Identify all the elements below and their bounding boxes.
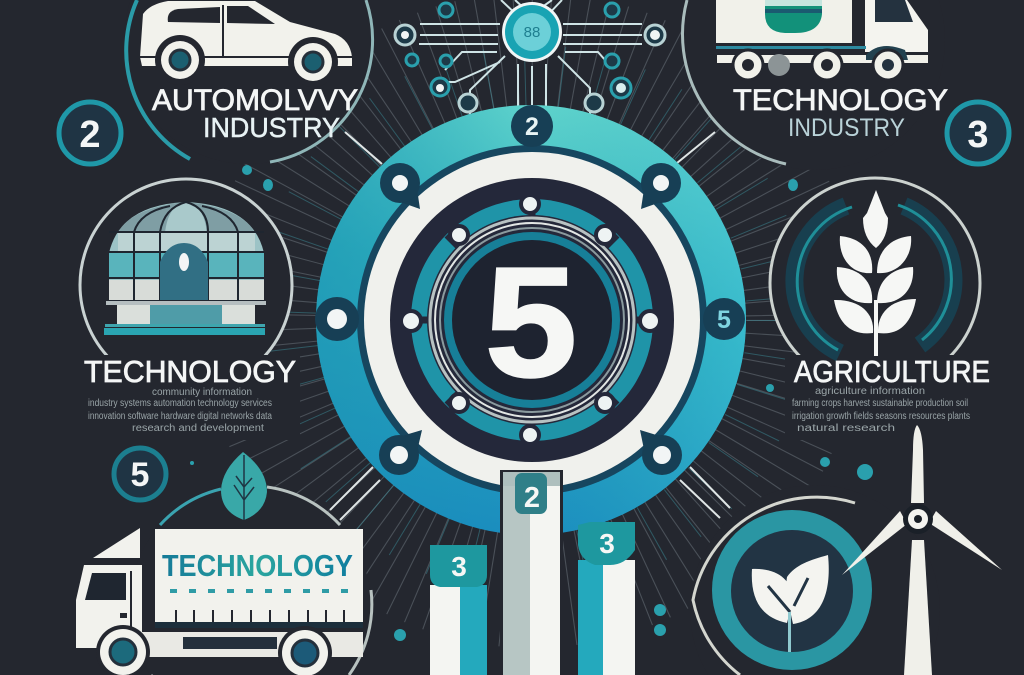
inner ring markers bbox=[401, 195, 660, 444]
badge: 5 bbox=[114, 448, 166, 500]
icon: car bbox=[140, 1, 354, 87]
outer ring markers bbox=[315, 105, 745, 475]
icon: truck bbox=[716, 0, 928, 80]
heading: technology: TECHNOLOGY bbox=[733, 84, 948, 117]
badge: 3: 3 bbox=[967, 114, 989, 156]
left bar: 3 bbox=[451, 551, 467, 582]
icon: truck bbox=[76, 528, 363, 675]
small text block: innovation software hardware digital networks data bbox=[88, 411, 272, 422]
center bar bbox=[500, 470, 563, 675]
teal ring bbox=[411, 199, 653, 441]
small text block: research and development bbox=[132, 423, 264, 434]
circuit icon: 88 bbox=[524, 24, 540, 41]
right bar bbox=[578, 522, 635, 675]
badge: 5: 5 bbox=[131, 456, 149, 494]
right bar: 3 bbox=[599, 528, 615, 559]
small text block bbox=[792, 386, 970, 434]
metal rings bbox=[430, 218, 634, 422]
number 5: 5 bbox=[485, 236, 577, 410]
outer ring markers: 2 bbox=[525, 113, 539, 141]
small text block: irrigation growth fields seasons resources plants bbox=[792, 411, 970, 422]
panel: delivery truck bbox=[76, 452, 372, 675]
icon: dome building bbox=[104, 202, 266, 335]
panel: agriculture bbox=[770, 178, 990, 440]
heading: automotive: AUTOMOLVVY bbox=[152, 84, 358, 117]
outer ring bbox=[316, 105, 746, 535]
heading: technology: TECHNOLOGY bbox=[84, 354, 296, 389]
center disc bbox=[444, 232, 620, 408]
panel: technology industry bbox=[682, 0, 948, 170]
heading: agriculture: AGRICULTURE bbox=[794, 354, 990, 389]
badge: 3 bbox=[947, 102, 1009, 164]
white ring bbox=[364, 152, 700, 488]
small text block bbox=[88, 387, 272, 434]
panel: automotive industry bbox=[124, 0, 373, 164]
radiating lines bbox=[262, 50, 802, 590]
heading: industry: INDUSTRY bbox=[203, 112, 340, 143]
icon: wind turbine bbox=[842, 425, 1002, 675]
panel: plant and wind turbine bbox=[690, 425, 1002, 675]
outer ring markers: 5 bbox=[717, 306, 731, 334]
icon: leaf ring bbox=[712, 510, 872, 670]
main circular diagram bbox=[315, 105, 746, 535]
small text block: community information bbox=[152, 387, 252, 398]
small text block: farming crops harvest sustainable production soil bbox=[792, 398, 968, 409]
truck label: TECHNOLOGY bbox=[162, 548, 353, 583]
scattered dots bbox=[190, 165, 873, 641]
badge: 2: 2 bbox=[79, 114, 101, 156]
circuit icon bbox=[395, 0, 665, 115]
heading: industry: INDUSTRY bbox=[788, 114, 905, 142]
small text block: natural research bbox=[797, 423, 895, 434]
icon: wheat bbox=[834, 190, 916, 356]
center bar: 2 bbox=[524, 482, 540, 514]
small text block: agriculture information bbox=[815, 386, 925, 397]
small text block: industry systems automation technology services bbox=[88, 398, 272, 409]
icon: leaf bbox=[221, 452, 267, 520]
badge: 2 bbox=[59, 102, 121, 164]
bar chart bbox=[430, 470, 635, 675]
left bar bbox=[430, 545, 487, 675]
panel: technology bbox=[78, 179, 300, 440]
